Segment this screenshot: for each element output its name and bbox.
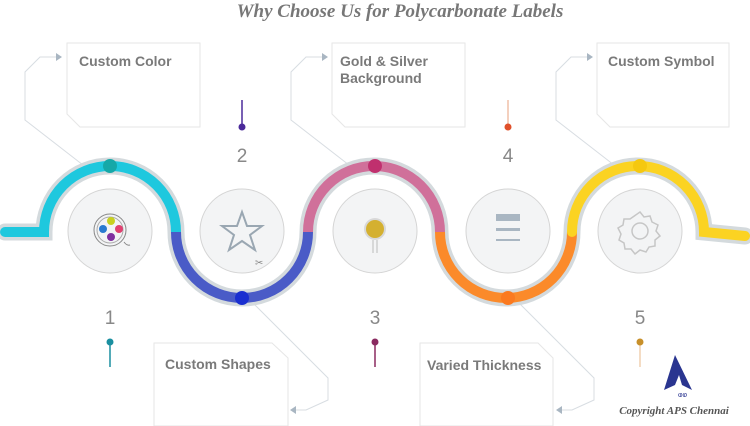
title: Why Choose Us for Polycarbonate Labels [237, 1, 563, 22]
icon: gold seal [364, 218, 386, 253]
wave dots [103, 159, 647, 305]
icon: thickness lines [496, 214, 520, 241]
logo [664, 355, 692, 399]
icon circles [68, 189, 682, 273]
box: custom shapes [154, 343, 288, 426]
numbers and pins [105, 146, 645, 329]
box: custom symbol: Custom Symbol [608, 53, 715, 69]
icon: star: ✂ [255, 258, 263, 269]
numbers and pins: 2 [237, 146, 247, 167]
box: gold silver [332, 43, 465, 127]
box: custom color: Custom Color [79, 53, 172, 69]
copyright: Copyright APS Chennai [619, 405, 730, 417]
icon: star [222, 212, 263, 269]
connectors [25, 57, 623, 410]
box: custom symbol [597, 43, 729, 127]
box: custom color [67, 43, 200, 127]
numbers and pins: 3 [370, 308, 380, 329]
box: varied thickness [420, 343, 553, 426]
icon: color palette [94, 214, 130, 246]
logo: ⱷⱷ [678, 392, 688, 399]
box: custom shapes: Custom Shapes [165, 356, 271, 372]
box: gold silver: Background [340, 70, 422, 86]
box: gold silver: Gold & Silver [340, 53, 428, 69]
icon: gear [618, 212, 660, 254]
numbers and pins: 4 [503, 146, 514, 167]
numbers and pins: 1 [105, 308, 115, 329]
box: varied thickness: Varied Thickness [427, 357, 542, 373]
wave [5, 166, 745, 298]
numbers and pins: 5 [635, 308, 645, 329]
